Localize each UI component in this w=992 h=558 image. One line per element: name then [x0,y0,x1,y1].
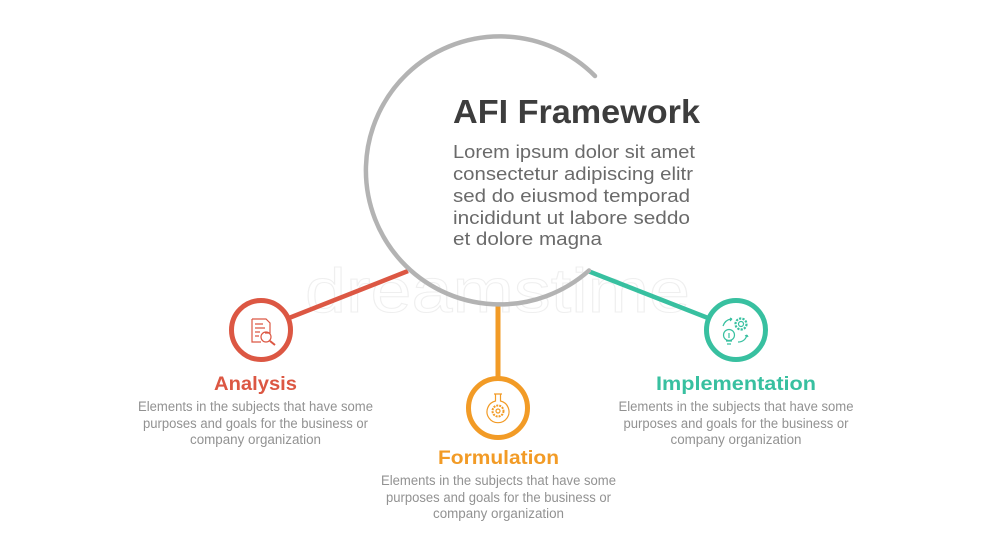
watermark: dreamstime [305,257,690,326]
node: analysis [138,300,373,447]
formulation text [381,473,616,521]
main description: sed do eiusmod temporad [453,186,690,206]
connector: analysis [289,271,408,318]
implementation text: purposes and goals for the business or [624,416,849,431]
connector: formulation [496,304,500,380]
implementation text: Elements in the subjects that have some [618,399,854,414]
main description [453,142,695,249]
node: formulation [381,378,616,521]
formulation text: company organization [433,506,564,521]
implementation text [618,399,854,447]
icon: flask with gear [487,394,509,423]
main description: Lorem ipsum dolor sit amet [453,142,695,162]
implementation text: company organization [670,432,802,447]
main description: et dolore magna [453,229,603,249]
formulation ring [468,378,528,438]
icon: bulb, gear and arrows [723,318,748,344]
analysis text [138,399,373,447]
analysis text: Elements in the subjects that have some [138,399,373,414]
formulation text: purposes and goals for the business or [386,490,611,505]
node: implementation [618,300,854,447]
main description: incididunt ut labore seddo [453,208,690,228]
main description: consectetur adipiscing elitr [453,164,693,184]
formulation heading: Formulation [438,448,559,469]
analysis text: purposes and goals for the business or [143,416,368,431]
implementation ring [706,300,766,360]
analysis ring [232,300,290,360]
formulation text: Elements in the subjects that have some [381,473,616,488]
connector: implementation [588,271,708,318]
title: AFI Framework [453,93,701,130]
icon: document with magnifier [252,319,275,345]
main open circle [366,36,595,304]
analysis heading: Analysis [214,374,297,395]
analysis text: company organization [190,432,321,447]
implementation heading: Implementation [656,374,816,395]
